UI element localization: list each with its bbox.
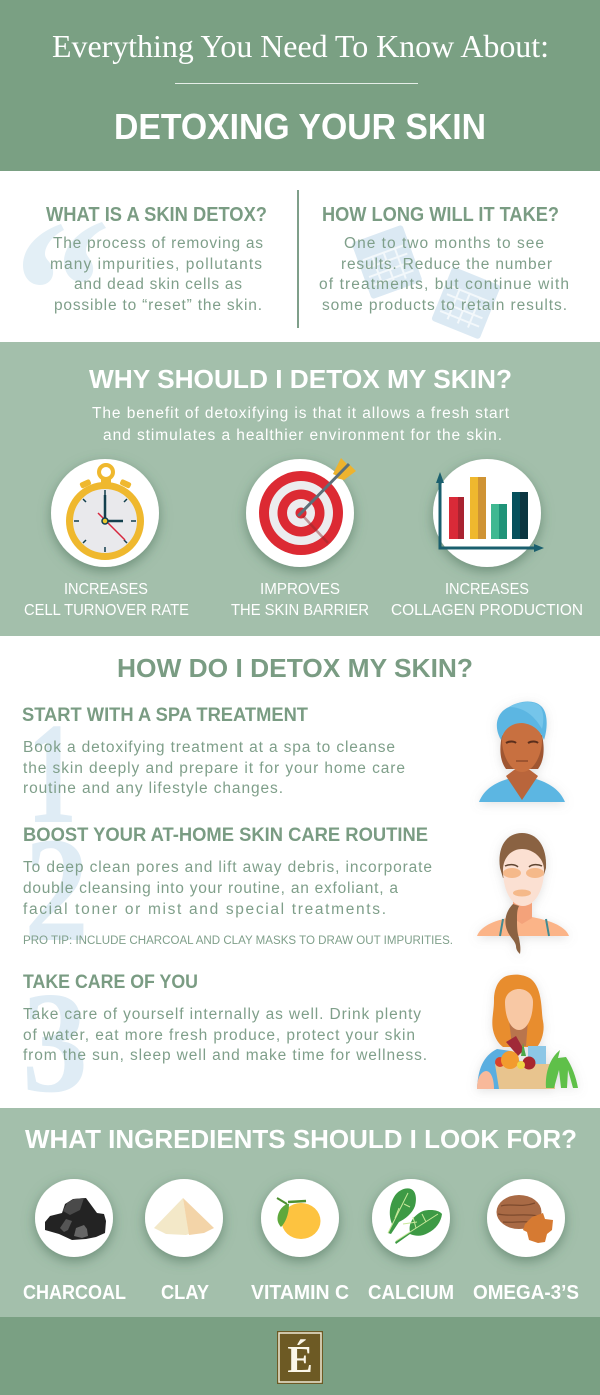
numeral 1 watermark: 1 xyxy=(27,694,77,854)
label: charcoal: CHARCOAL xyxy=(23,1282,126,1304)
panel: ingredients xyxy=(0,1108,600,1317)
text: what is a skin detox: and dead skin cells as xyxy=(74,276,242,293)
step 2 text: double cleansing into your routine, an exfoliant, a xyxy=(23,880,398,897)
step 3 text xyxy=(23,1006,427,1064)
text: what is a skin detox: The process of removing as xyxy=(53,235,263,252)
label: skin barrier xyxy=(231,581,369,619)
step 1 text: the skin deeply and prepare it for your home care xyxy=(23,760,405,777)
text: how long will it take: some products to retain results. xyxy=(322,297,567,314)
icon: spinach xyxy=(372,1179,450,1257)
label: omega-3s: OMEGA-3’S xyxy=(473,1282,579,1304)
header band xyxy=(0,0,600,171)
step 3 heading: TAKE CARE OF YOU xyxy=(23,972,198,993)
icon: calendars watermark xyxy=(351,225,501,340)
icon: clay xyxy=(145,1179,223,1257)
text: how long will it take xyxy=(319,235,569,314)
step 1 text xyxy=(23,739,405,797)
label: vitamin c: VITAMIN C xyxy=(251,1282,349,1304)
label: cell turnover xyxy=(24,581,189,619)
step 2 heading: BOOST YOUR AT-HOME SKIN CARE ROUTINE xyxy=(23,825,428,846)
step 1 text: routine and any lifestyle changes. xyxy=(23,780,283,797)
label: cell turnover: INCREASES xyxy=(64,581,148,598)
step 2 text xyxy=(23,859,432,918)
icon: walnut xyxy=(487,1179,565,1257)
pro tip: PRO TIP: INCLUDE CHARCOAL AND CLAY MASKS TO DRAW OUT IMPURITIES. xyxy=(23,935,453,947)
logo xyxy=(277,1331,323,1384)
icon: woman with face mask xyxy=(477,833,569,954)
label: collagen xyxy=(391,581,583,619)
icon: woman with towel xyxy=(479,702,565,802)
logo: É xyxy=(287,1339,313,1381)
icon: charcoal xyxy=(35,1179,113,1257)
icon: quotation mark watermark xyxy=(23,222,106,285)
step 3 text: of water, eat more fresh produce, protect your skin xyxy=(23,1027,415,1044)
heading: why should I detox: WHY SHOULD I DETOX MY SKIN? xyxy=(89,364,512,394)
label: cell turnover: CELL TURNOVER RATE xyxy=(24,602,189,619)
label: collagen: COLLAGEN PRODUCTION xyxy=(391,602,583,619)
text: how long will it take: One to two months to see xyxy=(344,235,544,252)
icon: stopwatch xyxy=(51,459,159,567)
heading: ingredients: WHAT INGREDIENTS SHOULD I LOOK FOR? xyxy=(25,1124,577,1154)
text: how long will it take: of treatments, but continue with xyxy=(319,276,569,293)
text: what is a skin detox: possible to “reset” the skin. xyxy=(54,297,262,314)
text: how long will it take: results. Reduce the number xyxy=(341,256,552,273)
heading: what is a skin detox: WHAT IS A SKIN DETOX? xyxy=(46,204,267,226)
step 1 heading: START WITH A SPA TREATMENT xyxy=(22,705,308,726)
label: collagen: INCREASES xyxy=(445,581,529,598)
panel: why detox xyxy=(0,342,600,636)
panel: intro xyxy=(0,171,600,342)
icon: woman with groceries xyxy=(477,975,578,1089)
text: why intro: The benefit of detoxifying is that it allows a fresh start xyxy=(92,405,510,422)
label: calcium: CALCIUM xyxy=(368,1282,454,1304)
text: what is a skin detox: many impurities, pollutants xyxy=(50,256,262,273)
icon: target xyxy=(246,458,356,567)
heading: how do I detox: HOW DO I DETOX MY SKIN? xyxy=(117,653,473,683)
step 3 text: Take care of yourself internally as well. Drink plenty xyxy=(23,1006,421,1023)
heading: how long will it take: HOW LONG WILL IT TAKE? xyxy=(322,204,559,226)
panel: how to detox xyxy=(0,636,600,1123)
text: why intro xyxy=(92,405,510,444)
title line: Everything You Need To Know About: xyxy=(52,28,549,64)
main title: DETOXING YOUR SKIN xyxy=(114,106,486,147)
icon: bar chart xyxy=(433,459,544,567)
numeral 2 watermark: 2 xyxy=(24,807,89,973)
step 1 text: Book a detoxifying treatment at a spa to cleanse xyxy=(23,739,395,756)
step 3 text: from the sun, sleep well and make time for wellness. xyxy=(23,1047,427,1064)
label: skin barrier: IMPROVES xyxy=(260,581,340,598)
icon: lemon xyxy=(261,1179,339,1257)
step 2 text: To deep clean pores and lift away debris, incorporate xyxy=(23,859,432,876)
text: what is a skin detox xyxy=(50,235,263,314)
text: why intro: and stimulates a healthier environment for the skin. xyxy=(103,427,502,444)
numeral 3 watermark: 3 xyxy=(22,963,88,1123)
footer xyxy=(0,1317,600,1395)
step 2 text: facial toner or mist and special treatments. xyxy=(23,901,386,918)
label: clay: CLAY xyxy=(161,1282,210,1304)
label: skin barrier: THE SKIN BARRIER xyxy=(231,602,369,619)
